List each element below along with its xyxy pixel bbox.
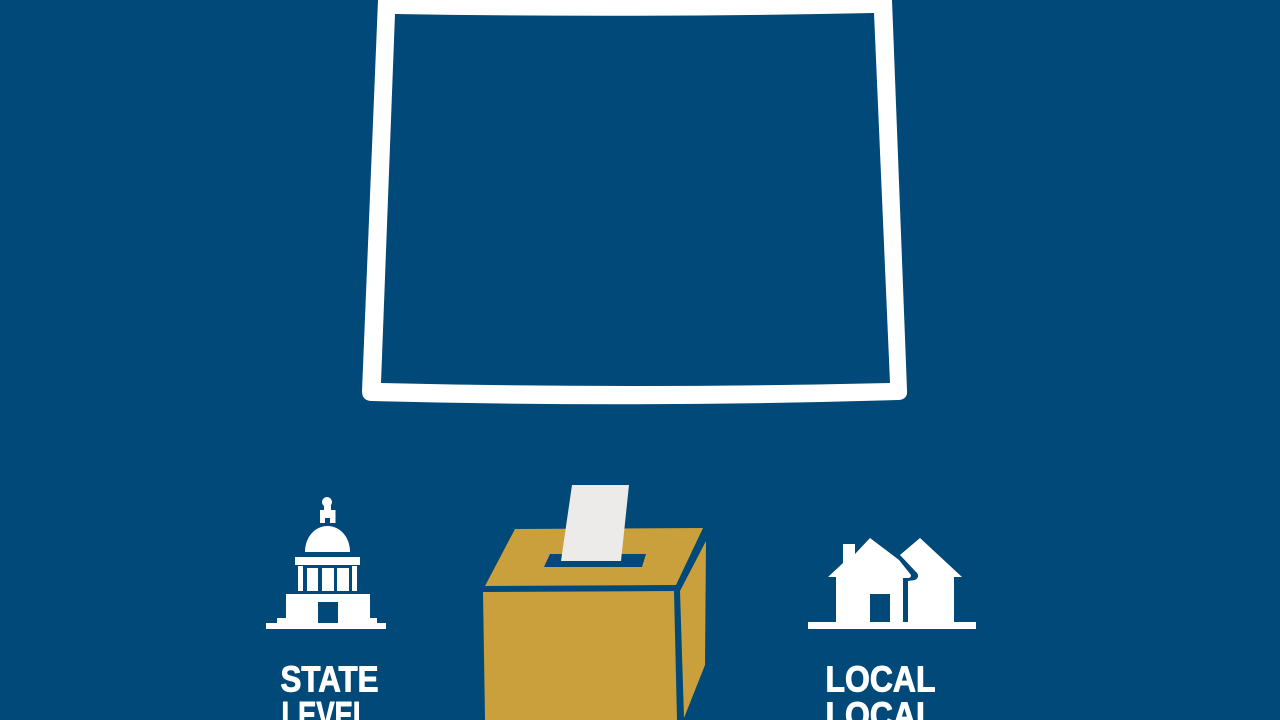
ballot slot	[544, 554, 646, 567]
icon: capitol building	[266, 497, 386, 629]
state outline frame	[362, 0, 907, 404]
label: local local	[826, 658, 936, 720]
label: local local: LOCAL	[826, 658, 936, 700]
local level column	[808, 538, 976, 720]
label: state level: STATE	[280, 658, 378, 700]
icon: ballot box	[483, 485, 706, 720]
ballot paper	[561, 485, 629, 561]
state level column	[266, 497, 386, 720]
icon: houses	[808, 538, 976, 629]
ballot box side	[680, 541, 706, 718]
label: state level	[280, 658, 378, 720]
ballot box front	[483, 591, 677, 720]
ballot box top	[485, 528, 703, 586]
